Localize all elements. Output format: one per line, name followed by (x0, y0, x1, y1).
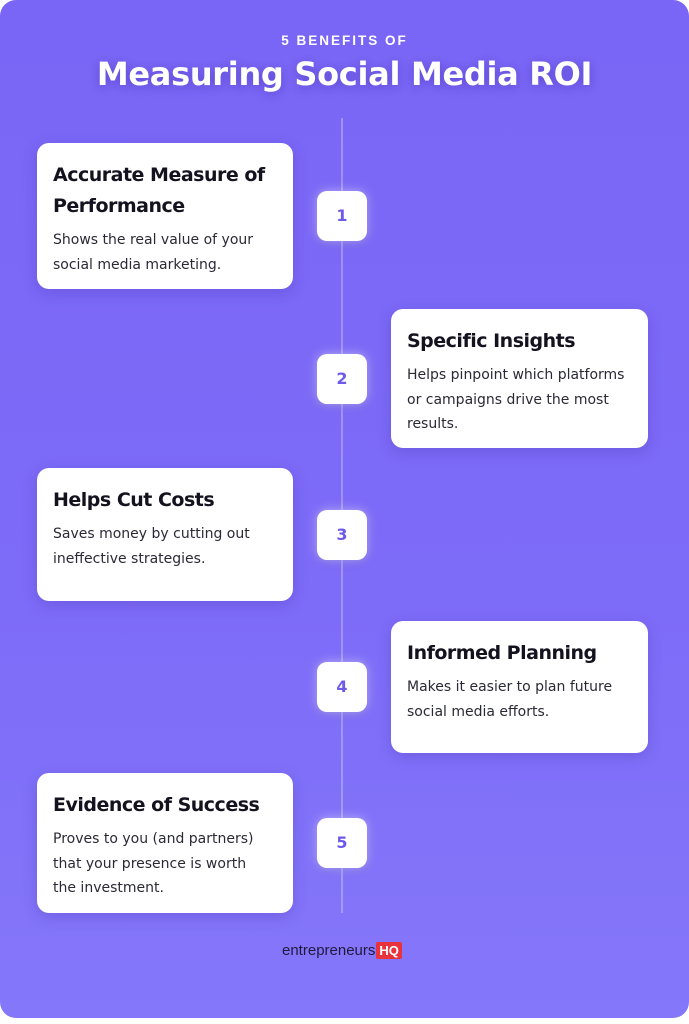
card 5: Proves to you (and partners) that your presence is worth the investment. (53, 831, 254, 896)
number 2 (317, 354, 367, 404)
card 3 (37, 468, 293, 601)
number 5 (317, 818, 367, 868)
number 1: 1 (336, 206, 348, 225)
number 4: 4 (336, 677, 348, 696)
number 5: 5 (336, 833, 348, 852)
card 2 (391, 309, 648, 448)
number 3 (317, 510, 367, 560)
card 2: Specific Insights (407, 330, 575, 352)
card 1 (37, 143, 293, 289)
logo: entrepreneurs HQ (282, 942, 399, 959)
card 4 (391, 621, 648, 753)
vertical line (341, 118, 343, 913)
number 3: 3 (336, 525, 348, 544)
card 4: Makes it easier to plan future social media efforts. (407, 679, 612, 720)
number 2: 2 (336, 369, 348, 388)
number 4 (317, 662, 367, 712)
card 3: Helps Cut Costs (53, 489, 214, 511)
card 5 (37, 773, 293, 913)
number 1 (317, 191, 367, 241)
card 1: Accurate Measure of Performance (53, 164, 265, 217)
subtitle: 5 BENEFITS OF (281, 33, 408, 48)
card 2: Helps pinpoint which platforms or campaigns drive the most results. (407, 367, 624, 432)
card 1: Shows the real value of your social media marketing. (53, 232, 253, 272)
card 3: Saves money by cutting out ineffective strategies. (53, 526, 250, 566)
card 4: Informed Planning (407, 642, 597, 664)
title: Measuring Social Media ROI (97, 55, 592, 93)
card 5: Evidence of Success (53, 794, 259, 816)
